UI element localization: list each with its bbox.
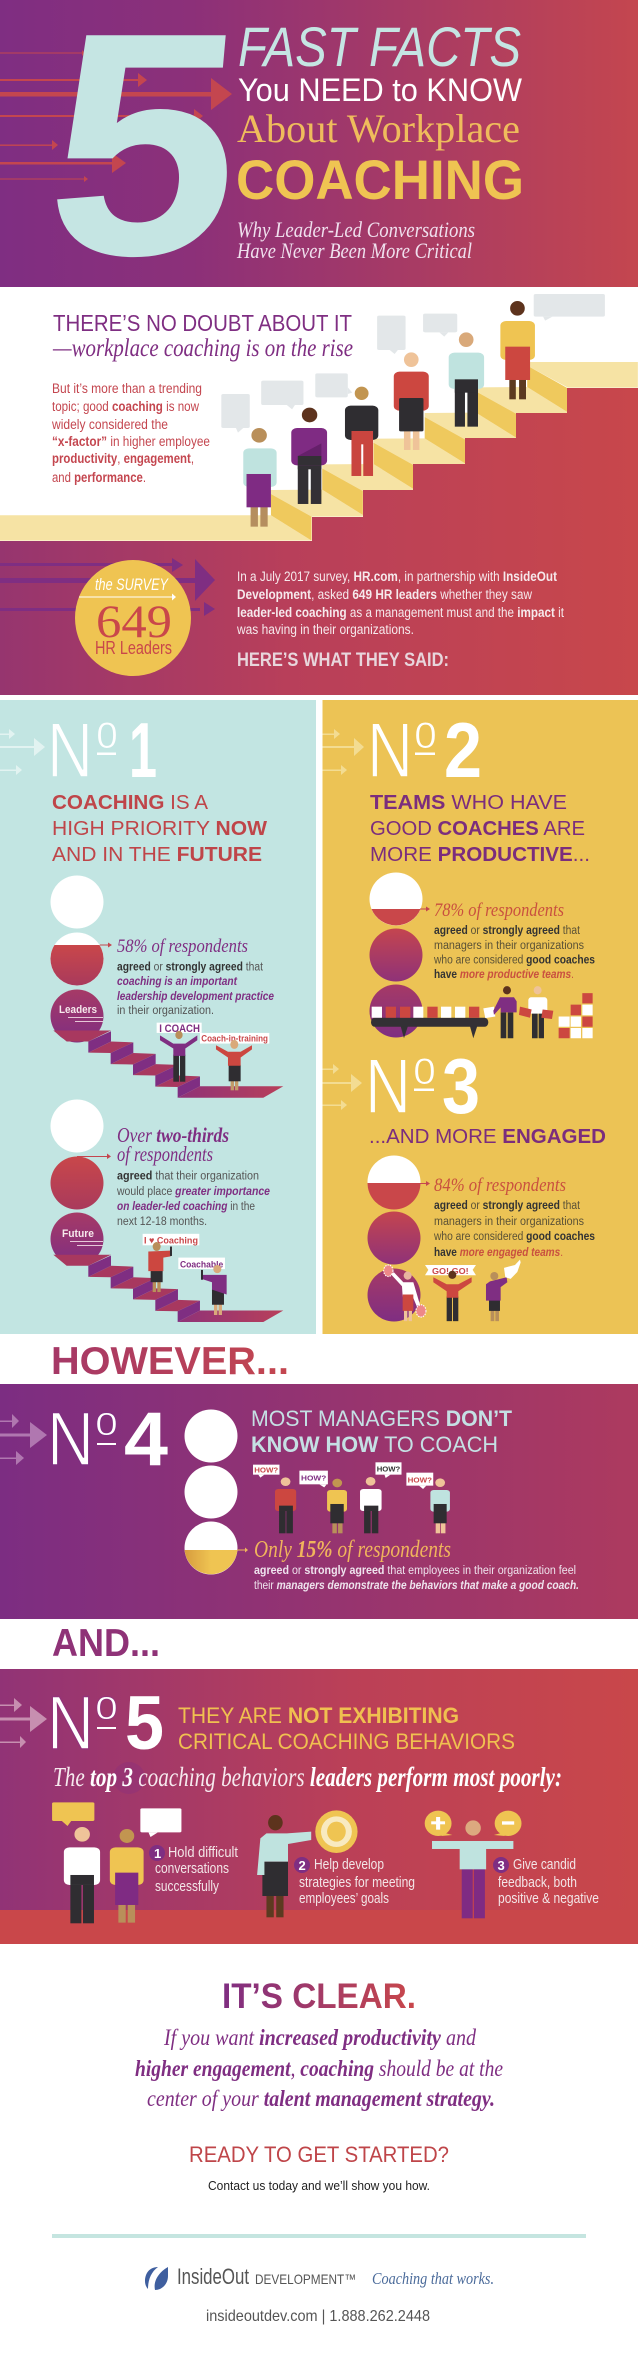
stat 84% text xyxy=(433,1175,595,1259)
behavior 3 text xyxy=(493,1857,599,1907)
behavior 3 text: feedback, both xyxy=(498,1875,577,1891)
stat 78% text: have more productive teams. xyxy=(434,969,574,981)
stat 84% text: who are considered good coaches xyxy=(433,1231,595,1243)
cheerleader xyxy=(384,1265,426,1321)
logo: DEVELOPMENT™ xyxy=(255,2271,356,2287)
stat 78% text: agreed or strongly agreed that xyxy=(434,925,581,937)
highlight circle xyxy=(113,1762,145,1794)
logo xyxy=(145,2264,494,2290)
fact 2 heading xyxy=(370,792,590,866)
intro body text: “x-factor” in higher employee xyxy=(52,434,210,449)
illustration: behavior figures xyxy=(52,1802,522,1923)
here's what they said: HERE’S WHAT THEY SAID: xyxy=(237,650,449,671)
label: leaders: Leaders xyxy=(59,1004,97,1016)
fact number 1 xyxy=(47,706,157,794)
manager 4 xyxy=(406,1473,450,1533)
stat two-thirds text: would place greater importance xyxy=(116,1186,271,1198)
figure: difficult conversation xyxy=(52,1802,181,1923)
intro body text xyxy=(51,381,210,485)
fact number 1: N xyxy=(47,706,93,794)
behavior 2 text: employees’ goals xyxy=(299,1891,389,1907)
intro heading: —workplace coaching is on the rise xyxy=(52,335,353,362)
illustration: conveyor and team xyxy=(371,986,593,1038)
subtitle: Have Never Been More Critical xyxy=(236,238,472,263)
callout arrow 15% xyxy=(237,1548,248,1552)
panel: fact 4 xyxy=(0,1384,638,1619)
stat 58% text: 58% of respondents xyxy=(117,936,248,957)
intro body text: widely considered the xyxy=(51,417,168,432)
behavior 1 text: Hold difficult xyxy=(168,1845,238,1861)
person 2 xyxy=(291,408,327,504)
go go banner figure: GO! GO! xyxy=(432,1266,469,1276)
figure: I love coaching xyxy=(143,1234,199,1292)
survey description: Development, asked 649 HR leaders whether they saw xyxy=(237,587,532,602)
fact 4 heading xyxy=(251,1406,512,1457)
survey arrows xyxy=(0,558,215,616)
fact number 3: 3 xyxy=(442,1042,480,1130)
fact 5 heading xyxy=(178,1703,515,1754)
manager 3 xyxy=(360,1462,402,1533)
survey description: In a July 2017 survey, HR.com, in partnership with InsideOut xyxy=(237,569,557,584)
closing section xyxy=(52,1977,586,2325)
person icon stack 58% xyxy=(50,876,104,1042)
behavior 3 text: Give candid xyxy=(513,1857,576,1873)
stat two-thirds text: agreed that their organization xyxy=(117,1170,259,1182)
fact 2 heading: TEAMS WHO HAVE xyxy=(370,792,567,814)
callout arrow two-thirds xyxy=(77,1154,111,1159)
figure: coachable xyxy=(178,1258,227,1315)
stat 15% text: Only 15% of respondents xyxy=(254,1537,451,1563)
panel: facts 2 and 3 xyxy=(322,700,638,1334)
illustration: managers asking how xyxy=(253,1462,450,1533)
person 5 xyxy=(449,332,484,427)
manager 3: HOW? xyxy=(377,1465,401,1473)
stat 78% text xyxy=(433,900,595,981)
label: future xyxy=(62,1228,103,1246)
panel: fact 1 xyxy=(0,700,316,1334)
subheading top 3 behaviors: The top 3 coaching behaviors leaders perform most poorly: xyxy=(53,1762,562,1792)
fact number 4 xyxy=(47,1397,168,1482)
stat 84% text: agreed or strongly agreed that xyxy=(434,1200,581,1212)
intro body text: topic; good coaching is now xyxy=(52,399,199,414)
fact 4 heading: MOST MANAGERS DON’T xyxy=(251,1406,512,1431)
manager 2: HOW? xyxy=(301,1474,326,1482)
person icon stack 84% xyxy=(368,1156,420,1322)
behavior 1 text xyxy=(149,1845,238,1895)
illustration: people on stairs with speech bubbles xyxy=(221,294,605,527)
worker purple xyxy=(493,986,517,1038)
closing statement xyxy=(135,2025,503,2111)
stat 58% text: coaching is an important xyxy=(117,976,238,988)
panel: workplace coaching on the rise xyxy=(0,294,638,695)
behavior 1 text: conversations xyxy=(155,1861,229,1877)
behavior 3 text: positive & negative xyxy=(498,1891,599,1907)
fact number 2: 2 xyxy=(444,706,482,794)
survey description xyxy=(236,569,564,637)
closing statement: If you want increased productivity and xyxy=(163,2025,476,2050)
arrows fact 1 xyxy=(0,729,45,775)
behavior 1 text: successfully xyxy=(155,1879,220,1895)
survey badge xyxy=(75,560,191,676)
stat 78% text: who are considered good coaches xyxy=(433,954,595,966)
fact 1 heading: COACHING IS A xyxy=(52,792,209,814)
arrows fact 2 xyxy=(322,729,364,775)
stat 15% text: agreed or strongly agreed that employees in their organization feel xyxy=(254,1563,576,1577)
heading: and: AND... xyxy=(52,1622,160,1665)
title line: you need to know: You NEED to KNOW xyxy=(238,72,523,108)
heading: however: HOWEVER... xyxy=(51,1340,289,1383)
stair illustration: leaders xyxy=(53,1023,283,1098)
person 6 xyxy=(500,301,535,399)
fact number 3: o xyxy=(413,1042,436,1095)
behavior 3 text: 3 xyxy=(498,1858,505,1873)
intro body text: But it’s more than a trending xyxy=(52,381,202,396)
worker white xyxy=(519,986,553,1038)
fact 1 heading: HIGH PRIORITY NOW xyxy=(52,818,267,840)
stair illustration: future xyxy=(53,1234,283,1322)
fact number 2 xyxy=(367,706,482,794)
figure: coach in training: Coach-in-training xyxy=(201,1034,268,1044)
callout arrow 84% xyxy=(420,1181,430,1186)
closing statement: center of your talent management strategy. xyxy=(147,2086,495,2111)
subtitle xyxy=(236,217,475,263)
stat 84% text: 84% of respondents xyxy=(434,1175,566,1196)
fact 1 heading: AND IN THE FUTURE xyxy=(52,844,262,866)
manager 4: HOW? xyxy=(408,1476,432,1484)
person 1 xyxy=(243,428,277,527)
person icon stack 15% xyxy=(184,1410,238,1574)
behavior 2 text: strategies for meeting xyxy=(299,1875,415,1891)
fact number 3 xyxy=(365,1042,480,1130)
stat 58% text: leadership development practice xyxy=(117,991,275,1003)
manager 1: HOW? xyxy=(254,1466,278,1474)
fact number 5: 5 xyxy=(125,1681,164,1766)
survey badge: 649 xyxy=(96,596,172,648)
stacked blocks xyxy=(559,993,593,1038)
speech bubbles xyxy=(221,294,605,433)
stat two-thirds text: on leader-led coaching in the xyxy=(117,1201,255,1213)
survey description: was having in their organizations. xyxy=(236,622,414,637)
label: leaders xyxy=(59,1004,103,1022)
contact details: insideoutdev.com | 1.888.262.2448 xyxy=(206,2308,430,2325)
stat two-thirds text xyxy=(116,1123,271,1228)
fact 2 heading: GOOD COACHES ARE xyxy=(370,818,585,840)
intro body text: and performance. xyxy=(52,470,146,485)
panel: fact 5 xyxy=(0,1669,638,1944)
behavior 2 text xyxy=(294,1857,415,1907)
fact number 1: o xyxy=(96,706,118,759)
figure: developing strategy xyxy=(257,1810,358,1917)
fact number 4: o xyxy=(95,1397,118,1444)
stat two-thirds text: Over two-thirds xyxy=(117,1123,229,1147)
fact number 3: N xyxy=(365,1042,411,1130)
fact number 4: 4 xyxy=(124,1397,168,1482)
fact number 4: N xyxy=(47,1397,94,1482)
illustration: staircase xyxy=(0,362,638,541)
fact 5 heading: THEY ARE NOT EXHIBITING xyxy=(178,1703,459,1728)
figure: I coach xyxy=(157,1023,202,1082)
intro heading xyxy=(52,310,353,362)
fact 5 heading: CRITICAL COACHING BEHAVIORS xyxy=(178,1729,515,1754)
figure: coach in training xyxy=(200,1033,269,1090)
stat 58% text: in their organization. xyxy=(117,1005,214,1017)
fact number 5: N xyxy=(47,1681,94,1766)
fact 3 heading: ...AND MORE ENGAGED xyxy=(369,1126,606,1148)
person icon stack 78% xyxy=(370,872,422,1038)
figure: I coach: I COACH xyxy=(159,1023,200,1035)
fact number 1: 1 xyxy=(129,706,157,794)
illustration: cheering team xyxy=(384,1260,521,1321)
title line: fast facts: FAST FACTS xyxy=(238,15,521,78)
subtitle: Why Leader-Led Conversations xyxy=(237,217,475,242)
fact 2 heading: MORE PRODUCTIVE... xyxy=(370,844,590,866)
fact number 5 xyxy=(47,1681,164,1766)
arrows fact 5 xyxy=(0,1698,47,1748)
stat 15% text: their managers demonstrate the behaviors that make a good coach. xyxy=(254,1578,579,1592)
contact line: Contact us today and we’ll show you how. xyxy=(208,2178,430,2193)
arrows fact 4 xyxy=(0,1414,47,1465)
title line: coaching: COACHING xyxy=(236,148,524,211)
stat two-thirds text: next 12-18 months. xyxy=(117,1216,207,1228)
foam finger figure xyxy=(486,1260,521,1321)
stat 78% text: 78% of respondents xyxy=(434,900,564,921)
header arrows xyxy=(0,50,232,182)
fact number 2: N xyxy=(367,706,413,794)
heading: it's clear: IT’S CLEAR. xyxy=(222,1977,416,2016)
title line: about workplace: About Workplace xyxy=(237,106,520,151)
survey badge: HR Leaders xyxy=(95,638,172,658)
stat 78% text: managers in their organizations xyxy=(434,940,584,952)
stat 58% text xyxy=(117,936,275,1017)
stat 15% text xyxy=(254,1537,579,1592)
person 3 xyxy=(345,387,378,476)
callout arrow 58% xyxy=(100,942,112,948)
conveyor belt xyxy=(371,1007,495,1038)
figure: I love coaching: I ♥ Coaching xyxy=(144,1235,198,1246)
manager 1 xyxy=(253,1465,296,1533)
logo: InsideOut xyxy=(177,2264,249,2289)
manager 2 xyxy=(299,1471,347,1533)
fact 4 heading: KNOW HOW TO COACH xyxy=(251,1432,498,1457)
call to action: READY TO GET STARTED? xyxy=(189,2142,449,2167)
stat two-thirds text: of respondents xyxy=(117,1142,213,1166)
fact 1 heading xyxy=(52,792,267,866)
arrows fact 3 xyxy=(322,1064,362,1110)
label: future: Future xyxy=(62,1228,94,1240)
closing statement: higher engagement, coaching should be at the xyxy=(135,2056,503,2081)
panel: header banner xyxy=(0,0,638,322)
fact number 2: o xyxy=(414,706,437,759)
stat 84% text: have more engaged teams. xyxy=(434,1247,563,1259)
behavior 2 text: 2 xyxy=(298,1858,306,1873)
figure: candid feedback xyxy=(425,1811,522,1918)
fact number 5: o xyxy=(95,1681,118,1728)
behavior 2 text: Help develop xyxy=(314,1857,384,1873)
logo: Coaching that works. xyxy=(372,2269,494,2288)
icon: logo mark xyxy=(145,2267,168,2290)
survey badge: the SURVEY xyxy=(95,575,169,594)
stat 84% text: managers in their organizations xyxy=(434,1216,584,1228)
person 4 xyxy=(394,352,429,450)
survey description: leader-led coaching as a management must and the impact it xyxy=(237,605,564,620)
intro body text: productivity, engagement, xyxy=(52,451,194,466)
figure: coachable: Coachable xyxy=(180,1259,224,1270)
intro heading: THERE’S NO DOUBT ABOUT IT xyxy=(53,310,352,336)
person icon stack two-thirds xyxy=(50,1100,104,1266)
behavior 1 text: 1 xyxy=(154,1846,161,1861)
lower gradient field xyxy=(0,388,638,695)
callout arrow 78% xyxy=(420,906,430,912)
stat 58% text: agreed or strongly agreed that xyxy=(117,962,264,974)
